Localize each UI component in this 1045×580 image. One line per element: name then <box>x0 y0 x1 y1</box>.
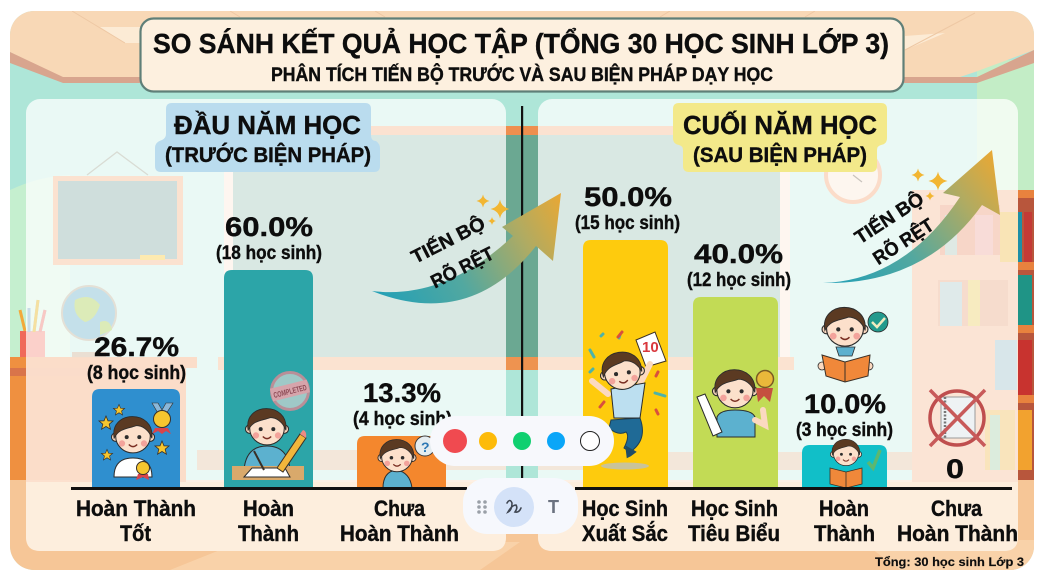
category: chưa hoàn thành <box>897 496 1018 546</box>
category: học sinh tiêu biểu: Tiêu Biểu <box>688 521 780 546</box>
bar: 13.3% <box>353 378 452 488</box>
category: chưa hoàn thành: Chưa <box>931 496 983 521</box>
icon: jumping student: 10 <box>642 339 659 356</box>
heading: left panel <box>155 103 380 172</box>
count: (18 học sinh) <box>216 243 322 264</box>
heading: right panel: (SAU BIỆN PHÁP) <box>693 143 867 167</box>
icon: jumping student <box>590 332 666 470</box>
category: học sinh tiêu biểu <box>688 496 780 546</box>
arrow label: TIẾN BỘ <box>408 212 489 268</box>
category: hoàn thành <box>238 496 299 546</box>
category: học sinh tiêu biểu: Học Sinh <box>691 496 778 521</box>
count: (12 học sinh) <box>687 270 791 291</box>
category: hoàn thành <box>814 496 875 546</box>
arrow: left progress <box>372 193 561 303</box>
count: (4 học sinh) <box>353 409 452 430</box>
axis <box>71 487 467 490</box>
icon: crossed notebook <box>930 390 985 446</box>
icon: student with diploma <box>697 370 774 437</box>
footer note: Tổng: 30 học sinh Lớp 3 <box>875 555 1024 569</box>
center divider <box>521 106 523 480</box>
category: hoàn thành tốt: Hoàn Thành <box>76 496 196 521</box>
icon: student reading large <box>818 307 888 382</box>
category: hoàn thành tốt: Tốt <box>120 521 152 546</box>
panel: left <box>26 99 506 551</box>
icon: text tool: T <box>548 497 559 517</box>
axis <box>575 487 1012 490</box>
category: hoàn thành: Hoàn <box>243 496 294 521</box>
category: hoàn thành: Hoàn <box>819 496 869 521</box>
category: hoàn thành: Thành <box>814 521 875 546</box>
arrow: right progress: RÕ RỆT <box>869 214 938 270</box>
bar: 10.0% <box>796 389 893 488</box>
faint classroom objects behind right panel <box>538 148 1018 551</box>
icon: student with medals <box>99 403 173 480</box>
value: 50.0% <box>584 182 672 212</box>
icon: student writing <box>232 372 310 480</box>
bar: 50.0% <box>575 182 680 488</box>
value: zero: 0 <box>946 454 964 484</box>
icon: student writing: COMPLETED <box>273 383 308 400</box>
category: học sinh xuất sắc <box>582 496 668 546</box>
bar: 26.7% <box>87 332 186 488</box>
value: 10.0% <box>804 389 886 419</box>
bar chart: end of year <box>575 182 1018 546</box>
swatch: yellow <box>479 432 497 450</box>
title box <box>140 18 904 92</box>
value: 26.7% <box>94 332 179 362</box>
faint classroom objects behind left panel <box>26 152 506 551</box>
color palette toolbar <box>430 416 614 466</box>
bar: 40.0% <box>687 239 791 488</box>
category: chưa hoàn thành: Hoàn Thành <box>897 521 1018 546</box>
value: 40.0% <box>694 239 783 269</box>
icon: grip <box>477 500 487 514</box>
panel: right <box>538 99 1018 551</box>
count: (3 học sinh) <box>796 420 893 441</box>
title text: SO SÁNH KẾT QUẢ HỌC TẬP (TỔNG 30 HỌC SINH LỚP 3) <box>153 27 889 59</box>
value: 60.0% <box>225 212 313 242</box>
icon: student reading small <box>830 439 880 488</box>
category: chưa hoàn thành: Hoàn Thành <box>340 521 459 546</box>
tool toolbar <box>463 478 578 534</box>
heading: left panel: ĐẦU NĂM HỌC <box>174 110 361 140</box>
count: (8 học sinh) <box>87 363 186 384</box>
icon: pen tool <box>494 487 534 527</box>
swatch: red <box>443 429 467 453</box>
count: (15 học sinh) <box>575 213 680 234</box>
value: 13.3% <box>363 378 441 408</box>
arrow label: TIẾN BỘ <box>851 188 928 249</box>
swatch: white <box>580 432 600 450</box>
arrow: left progress: RÕ RỆT <box>427 242 498 293</box>
heading: right panel: CUỐI NĂM HỌC <box>683 110 877 140</box>
icon: student thinking: ? <box>421 439 430 455</box>
heading: left panel: (TRƯỚC BIỆN PHÁP) <box>165 143 371 167</box>
bar chart: start of year <box>71 212 467 546</box>
subtitle text: PHÂN TÍCH TIẾN BỘ TRƯỚC VÀ SAU BIỆN PHÁP DẠY HỌC <box>271 64 773 86</box>
category: học sinh xuất sắc: Học Sinh <box>582 496 668 521</box>
bar: 60.0% <box>216 212 322 488</box>
arrow: right progress <box>823 150 1000 283</box>
swatch: green <box>513 432 531 450</box>
category: học sinh xuất sắc: Xuất Sắc <box>582 521 668 546</box>
category: chưa hoàn thành <box>340 496 459 546</box>
category: chưa hoàn thành: Chưa <box>374 496 426 521</box>
swatch: blue <box>547 432 565 450</box>
category: hoàn thành: Thành <box>238 521 299 546</box>
heading: right panel <box>673 103 887 172</box>
category: hoàn thành tốt <box>76 496 196 546</box>
